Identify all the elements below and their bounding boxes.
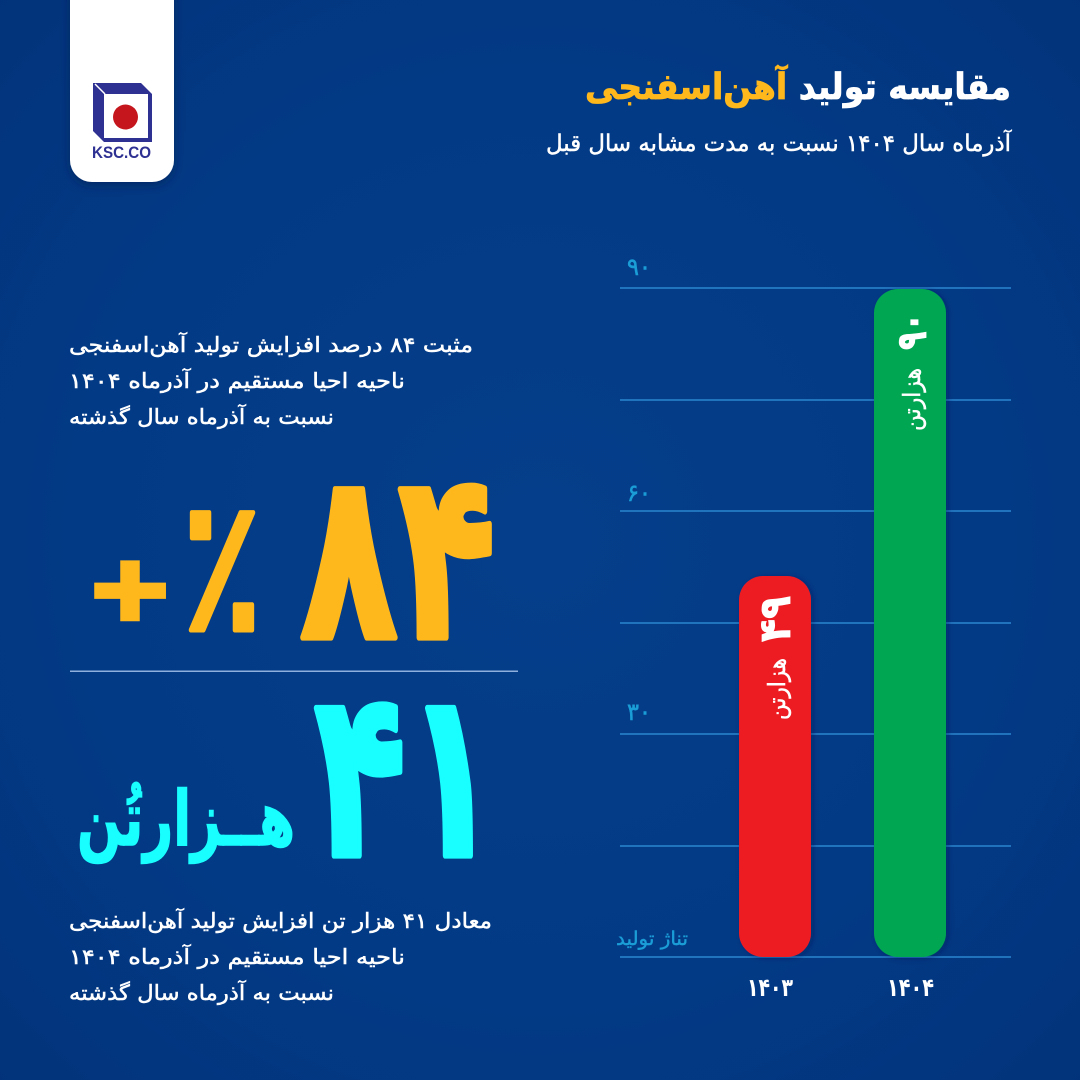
value: 49: ۴۹ xyxy=(750,596,801,642)
text block: bottom description: نسبت به آذرماه سال گذشته xyxy=(69,980,334,1005)
big number: +84% xyxy=(91,421,496,693)
year labels xyxy=(747,973,934,1002)
big number: 41 thousand tons xyxy=(77,641,498,911)
text block: bottom description: ناحیه احیا مستقیم در آذرماه ۱۴۰۴ xyxy=(69,944,405,970)
text block: top description: مثبت ۸۴ درصد افزایش تولید آهن‌اسفنجی xyxy=(69,332,473,357)
text block: bottom description: معادل ۴۱ هزار تن افزایش تولید آهن‌اسفنجی xyxy=(69,908,492,933)
subtitle: آذرماه سال ۱۴۰۴ نسبت به مدت مشابه سال قبل xyxy=(546,129,1013,157)
big number: +84%: ۸۴ xyxy=(300,421,496,693)
axis labels: ۹۰ xyxy=(627,253,651,281)
year labels: ۱۴۰۴ xyxy=(887,973,934,1002)
icon: KSC cube xyxy=(93,83,152,142)
big number: 41 thousand tons: ۴۱ xyxy=(314,641,498,911)
big number: +84%: ٪ xyxy=(182,460,262,675)
chart grid lines xyxy=(620,288,1011,957)
text block: top description: ناحیه احیا مستقیم در آذرماه ۱۴۰۴ xyxy=(69,368,405,394)
axis title: تناژ تولید xyxy=(616,928,688,950)
logo panel xyxy=(70,0,174,182)
unit: هــزارتُن xyxy=(77,774,295,864)
unit: هزارتن xyxy=(763,658,791,720)
axis labels xyxy=(627,253,651,726)
bar chart xyxy=(616,253,1011,1002)
text block: bottom description xyxy=(69,908,492,1005)
value: 90: ۹۰ xyxy=(887,313,936,350)
bar: 1403 xyxy=(739,576,811,957)
divider xyxy=(70,670,518,672)
axis labels: ۳۰ xyxy=(627,698,651,726)
axis labels: ۶۰ xyxy=(627,479,651,507)
title: مقایسه تولید آهن‌اسفنجی xyxy=(585,64,1011,108)
year labels: ۱۴۰۳ xyxy=(747,973,793,1002)
text block: top description xyxy=(69,332,473,429)
text block: top description: نسبت به آذرماه سال گذشته xyxy=(69,404,334,429)
bar: 1404 xyxy=(874,289,946,957)
unit: هزارتن xyxy=(898,368,926,431)
logo wordmark: KSC.CO xyxy=(92,143,151,162)
big number: +84%: + xyxy=(91,527,169,652)
